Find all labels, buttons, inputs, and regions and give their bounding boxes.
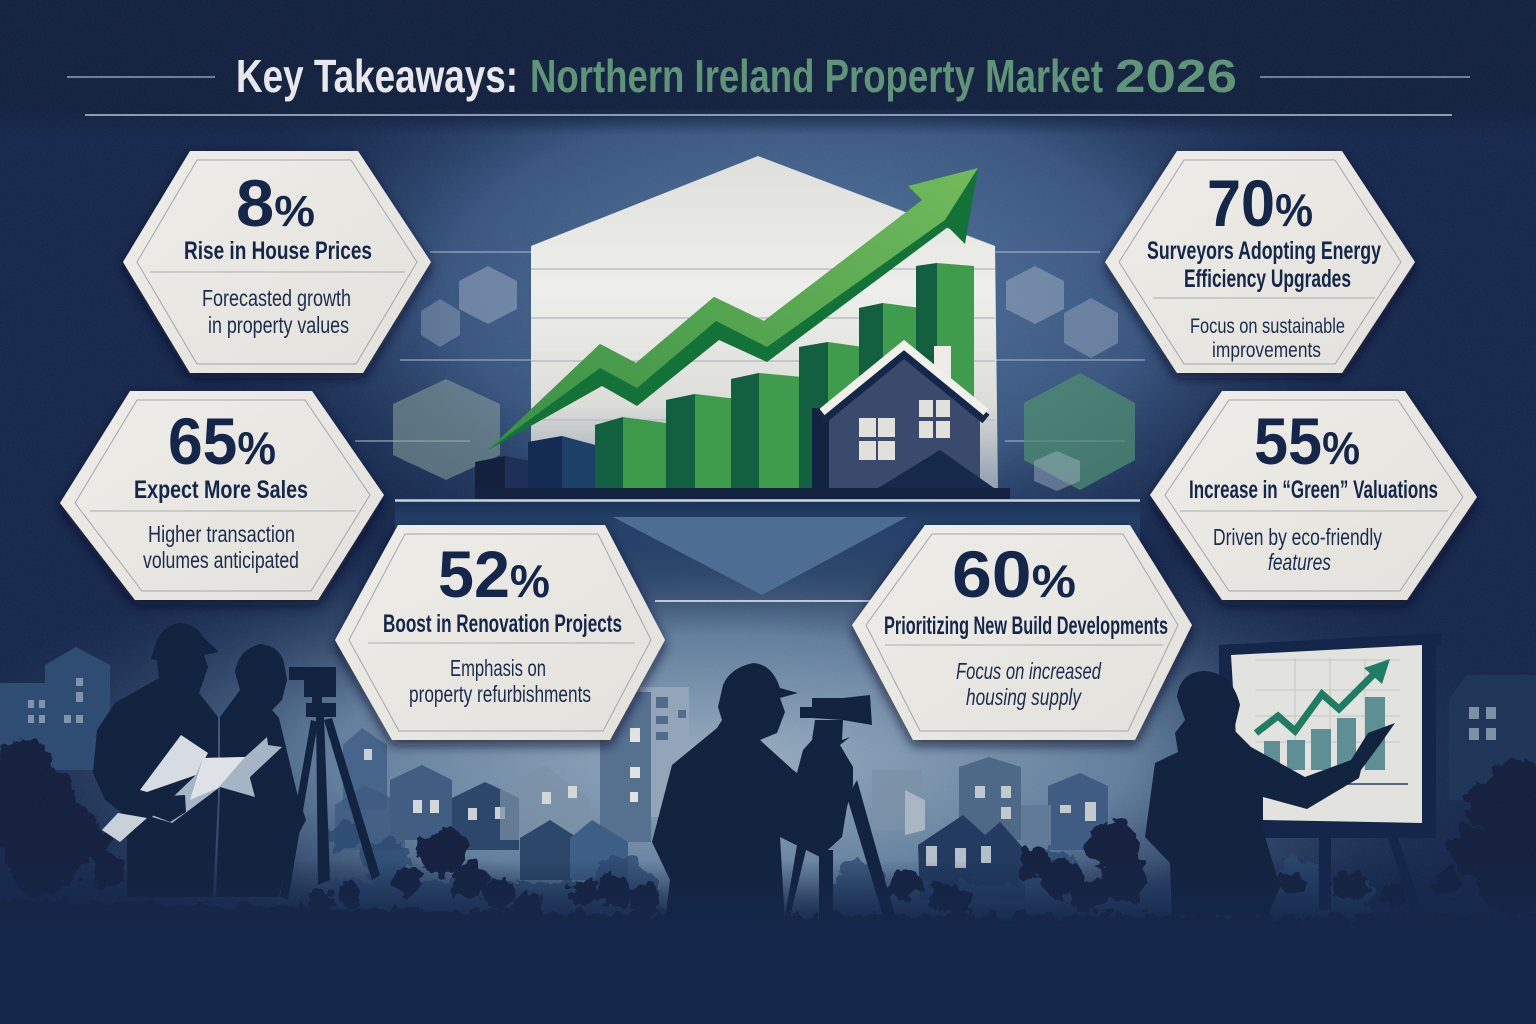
card: 8% rise in house prices xyxy=(123,151,431,373)
card: 60% new build developments: 60% xyxy=(952,537,1076,611)
card: 65% expect more sales: Expect More Sales xyxy=(134,476,308,504)
card: 65% expect more sales: Higher transaction xyxy=(148,521,295,547)
background town xyxy=(0,647,1536,900)
card: 52% renovation projects: Emphasis on xyxy=(450,655,546,681)
presenter xyxy=(1145,671,1395,915)
card: 8% rise in house prices: Rise in House Prices xyxy=(184,237,372,265)
buildings centre-left xyxy=(335,687,689,880)
card: 70% energy efficiency: Surveyors Adopting Energy xyxy=(1147,237,1381,265)
card: 60% new build developments: Focus on increased xyxy=(956,658,1102,684)
card: 65% expect more sales: volumes anticipated xyxy=(143,547,299,573)
card: 52% renovation projects: 52% xyxy=(438,537,550,611)
card: 52% renovation projects: Boost in Renovation Projects xyxy=(383,610,622,638)
growth arrow xyxy=(488,168,978,450)
card: 55% green valuations: 55% xyxy=(1254,404,1360,478)
title: Key Takeaways: xyxy=(236,50,518,102)
card: 60% new build developments xyxy=(852,525,1192,740)
title xyxy=(67,50,1470,115)
card: 52% renovation projects xyxy=(335,525,665,740)
building far right xyxy=(1449,675,1536,800)
card: 8% rise in house prices: in property values xyxy=(208,312,349,338)
card: 70% energy efficiency: 70% xyxy=(1207,166,1313,240)
map papers xyxy=(102,735,282,842)
surveyor holding plans xyxy=(93,623,219,897)
easel legs xyxy=(1319,838,1422,912)
card: 70% energy efficiency: improvements xyxy=(1212,339,1321,362)
decorative hexagons xyxy=(393,266,1135,491)
survey camera on tripod xyxy=(785,695,897,923)
buildings centre-right xyxy=(872,757,1108,900)
presentation board xyxy=(1219,633,1442,912)
card: 8% rise in house prices: Forecasted growth xyxy=(202,285,351,311)
white house backdrop xyxy=(531,156,998,490)
card: 8% rise in house prices: 8% xyxy=(236,166,315,240)
trees and ground xyxy=(0,740,1536,1000)
bottom fade xyxy=(0,860,1536,1024)
bars xyxy=(475,263,974,488)
card: 55% green valuations: features xyxy=(1268,549,1331,575)
card: 65% expect more sales: 65% xyxy=(168,404,276,478)
theodolite xyxy=(280,667,380,900)
card: 65% expect more sales xyxy=(60,391,384,600)
card: 70% energy efficiency: Efficiency Upgrades xyxy=(1184,265,1351,293)
surveyor at tripod xyxy=(216,644,380,900)
card: 70% energy efficiency: Focus on sustainable xyxy=(1190,315,1345,338)
card: 70% energy efficiency xyxy=(1105,151,1415,373)
baseline xyxy=(395,488,1140,500)
title: 2026 xyxy=(1115,50,1237,102)
title: Northern Ireland Property Market xyxy=(530,50,1103,102)
card: 52% renovation projects: property refurbishments xyxy=(409,681,591,707)
distant buildings left xyxy=(0,647,110,770)
card: 55% green valuations xyxy=(1150,391,1477,600)
card: 60% new build developments: housing supply xyxy=(966,684,1082,710)
chevron backdrop xyxy=(395,502,1140,614)
hazy tree line xyxy=(327,817,1370,930)
mini chart xyxy=(1255,658,1408,784)
card: 55% green valuations: Driven by eco-friendly xyxy=(1213,524,1382,550)
card: 60% new build developments: Prioritizing New Build Developments xyxy=(884,612,1168,640)
house xyxy=(812,345,994,488)
connector lines xyxy=(355,252,1145,441)
connector line below chart xyxy=(655,600,875,602)
hero chart: house, bars and arrow xyxy=(395,156,1140,500)
central surveyor xyxy=(652,663,897,923)
